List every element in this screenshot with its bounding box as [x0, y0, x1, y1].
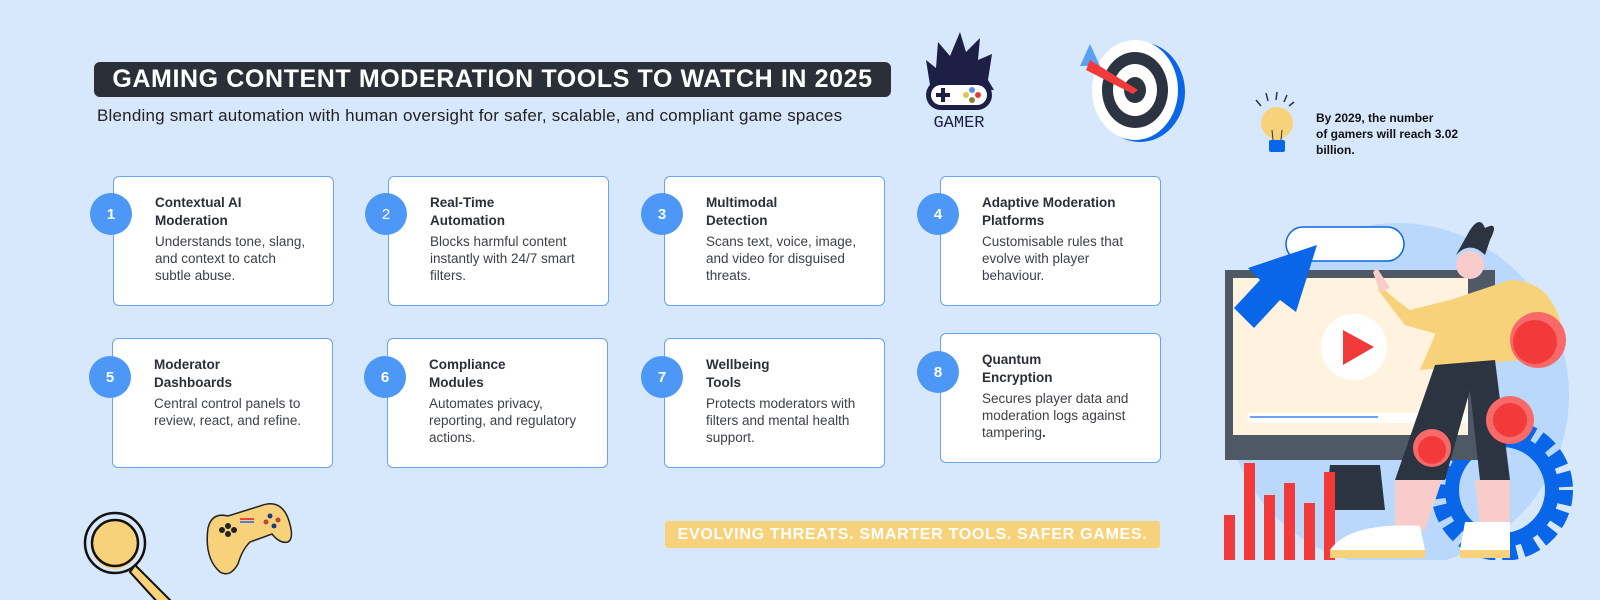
card 1: Moderation: [155, 213, 228, 228]
card 1: Contextual AI: [155, 195, 242, 210]
card 1: [113, 176, 334, 306]
card 6: Compliance: [429, 357, 506, 372]
card 3: Scans text, voice, image, and video for disguised threats.: [706, 234, 856, 283]
person: [1420, 280, 1565, 370]
card 6: [387, 338, 608, 468]
icon: magnifier: [84, 512, 172, 600]
badge 5: [89, 356, 131, 398]
icon: gamepad: [206, 503, 292, 574]
card 8: Encryption: [982, 370, 1053, 385]
card 8: Secures player data and moderation logs against tampering.: [982, 391, 1128, 440]
subtitle: Blending smart automation with human oversight for safer, scalable, and compliant game spaces: [97, 106, 842, 125]
card 7: Tools: [706, 375, 741, 390]
search box: [1286, 227, 1404, 261]
badge 3: 3: [658, 206, 666, 222]
badge 6: 6: [381, 368, 389, 386]
monitor: [1225, 270, 1495, 460]
card 4: Platforms: [982, 213, 1044, 228]
card 5: [112, 338, 333, 468]
illustration: moderator with screen: [1224, 222, 1573, 560]
badge 6: [364, 356, 406, 398]
red circles: [1510, 312, 1566, 368]
badge 2: 2: [382, 206, 390, 222]
card 2: [388, 176, 609, 306]
card 1: Understands tone, slang, and context to catch subtle abuse.: [155, 234, 305, 283]
bars: [1224, 463, 1335, 560]
card 3: Detection: [706, 213, 768, 228]
card 2: Blocks harmful content instantly with 24/7 smart filters.: [430, 234, 575, 283]
card 6: Modules: [429, 375, 484, 390]
badge 2: [365, 193, 407, 235]
badge 4: 4: [934, 206, 942, 222]
card 5: Central control panels to review, react, and refine.: [154, 396, 301, 428]
badge 7: [641, 356, 683, 398]
badge 3: [641, 193, 683, 235]
card 3: Multimodal: [706, 195, 777, 210]
badge 7: 7: [658, 368, 666, 386]
card 5: Moderator: [154, 357, 220, 372]
badge 8: [917, 351, 959, 393]
card 2: Automation: [430, 213, 505, 228]
card 5: Dashboards: [154, 375, 232, 390]
card 7: Wellbeing: [706, 357, 770, 372]
badge 8: 8: [934, 364, 942, 380]
card 7: Protects moderators with filters and mental health support.: [706, 396, 855, 445]
card 6: Automates privacy, reporting, and regulatory actions.: [429, 396, 576, 445]
stat callout: [1316, 111, 1458, 157]
card 2: Real-Time: [430, 195, 494, 210]
badge 4: [917, 193, 959, 235]
card 7: [664, 338, 885, 468]
icon: lightbulb: [1256, 92, 1294, 152]
badge 1: 1: [107, 206, 115, 222]
title: GAMING CONTENT MODERATION TOOLS TO WATCH IN 2025: [112, 65, 873, 93]
stat callout: of gamers will reach 3.02 billion.: [1316, 127, 1458, 157]
card 8: [940, 333, 1161, 463]
gear: [1442, 430, 1562, 550]
icon: target: [1080, 40, 1185, 142]
stat callout: By 2029, the number: [1316, 111, 1433, 125]
icon: gamer logo: [926, 32, 994, 130]
footer banner: EVOLVING THREATS. SMARTER TOOLS. SAFER GAMES.: [678, 526, 1147, 543]
card 8: Quantum: [982, 352, 1041, 367]
card 4: [940, 176, 1161, 306]
badge 1: [90, 193, 132, 235]
card 4: Customisable rules that evolve with player behaviour.: [982, 234, 1123, 283]
arrow cursor: [1234, 245, 1317, 328]
badge 5: 5: [106, 368, 114, 386]
card 4: Adaptive Moderation: [982, 195, 1116, 210]
footer banner: [665, 521, 1160, 548]
card 3: [664, 176, 885, 306]
